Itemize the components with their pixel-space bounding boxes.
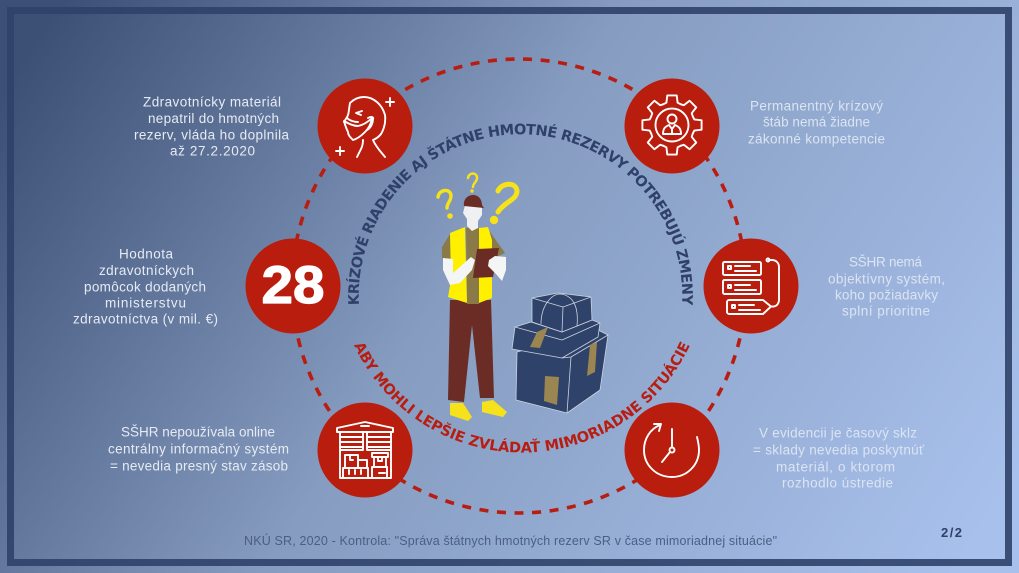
text: information system: centrálny informačný systém xyxy=(108,442,289,456)
head xyxy=(463,205,482,231)
text: time lag: V evidencii je časový sklz xyxy=(759,426,917,440)
clipboard xyxy=(473,248,499,278)
illustration: worker with clipboard xyxy=(438,174,517,421)
text: medical material: až 27.2.2020 xyxy=(170,144,255,158)
text: medical material xyxy=(134,94,289,158)
vest xyxy=(448,227,467,303)
icon: server list with arrow xyxy=(704,238,798,334)
text: crisis staff: štáb nemá žiadne xyxy=(763,114,870,130)
text: prioritisation xyxy=(828,254,945,318)
icon: clock xyxy=(624,402,720,498)
text: medical material: nepatril do hmotných xyxy=(148,111,279,126)
text: information system: SŠHR nepoužívala online xyxy=(121,424,275,440)
arms xyxy=(443,257,475,285)
text: value of supplies: pomôcok dodaných xyxy=(84,280,206,294)
icon: number 28 xyxy=(246,238,340,334)
text: time lag: = sklady nevedia poskytnúť xyxy=(753,442,925,458)
text: crisis staff xyxy=(748,98,885,146)
sleeves xyxy=(442,232,505,260)
question marks xyxy=(438,174,517,212)
text: value of supplies: ministerstvu xyxy=(105,296,186,310)
icon: face mask xyxy=(318,78,412,174)
shoes xyxy=(450,403,472,421)
torso xyxy=(466,228,479,304)
illustration: stacked boxes xyxy=(512,293,608,413)
text: time lag: rozhodlo ústredie xyxy=(782,476,893,490)
text: medical material: Zdravotnícky materiál xyxy=(143,94,281,110)
icon: gear with person xyxy=(624,78,720,174)
text: value of supplies xyxy=(73,246,218,326)
text: prioritisation: koho požiadavky xyxy=(835,288,938,302)
page number: 2/2 xyxy=(941,525,962,540)
text: time lag xyxy=(753,426,925,490)
text: prioritisation: objektívny systém, xyxy=(828,272,945,286)
text: time lag: materiál, o ktorom xyxy=(776,460,895,474)
text: prioritisation: SŠHR nemá xyxy=(849,254,922,270)
text: crisis staff: Permanentný krízový xyxy=(750,98,883,114)
text: crisis staff: zákonné kompetencie xyxy=(748,132,885,146)
text: value of supplies: zdravotníctva (v mil. €) xyxy=(73,312,218,326)
icon: warehouse xyxy=(318,402,412,498)
text: prioritisation: splní prioritne xyxy=(842,304,930,318)
trousers xyxy=(448,300,494,402)
curved heading: top: KRÍZOVÉ RIADENIE AJ ŠTÁTNE HMOTNÉ REZERVY POTREBUJÚ ZMENY xyxy=(346,124,693,306)
text: value of supplies: Hodnota xyxy=(119,246,173,262)
icon: number 28: 28 xyxy=(262,256,324,315)
text: information system: = nevedia presný stav zásob xyxy=(110,458,288,474)
footer source: NKÚ SR, 2020 - Kontrola: "Správa štátnych hmotných rezerv SR v čase mimoriadnej situácie" xyxy=(244,533,777,548)
dashed ring xyxy=(292,59,746,513)
text: information system xyxy=(108,424,289,474)
text: value of supplies: zdravotníckych xyxy=(99,263,194,278)
curved heading: bottom: ABY MOHLI LEPŠIE ZVLÁDAŤ MIMORIADNE SITUÁCIE xyxy=(354,341,690,453)
text: medical material: rezerv, vláda ho doplnila xyxy=(134,128,289,142)
